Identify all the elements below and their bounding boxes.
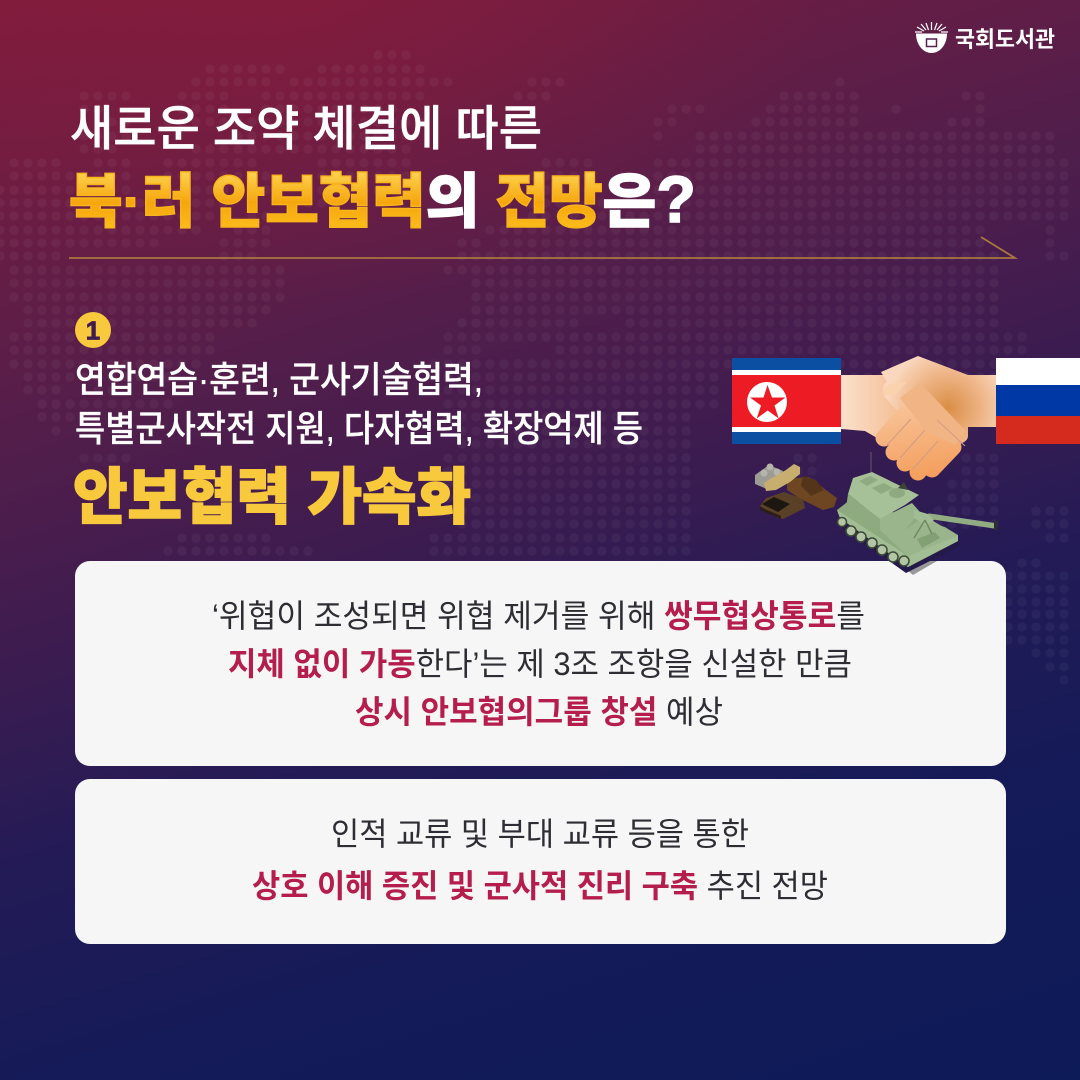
icon: North Korea flag xyxy=(732,358,841,444)
background world map dots xyxy=(0,55,1078,680)
number badge 1: 1 xyxy=(86,316,100,346)
brown truck xyxy=(787,477,837,510)
number badge 1 xyxy=(75,312,111,348)
icon: library emblem xyxy=(915,22,948,53)
ground shadow xyxy=(896,561,937,575)
panel: card 1 xyxy=(75,561,1006,766)
gun barrel xyxy=(928,516,996,526)
gun mount xyxy=(914,510,934,526)
title line 1: 새로운 조약 체결에 따른 xyxy=(70,103,542,156)
hull xyxy=(837,500,958,567)
front glacis xyxy=(880,516,958,556)
logo: 국회도서관 xyxy=(915,22,1055,53)
text: card 2 body: 인적 교류 및 부대 교류 등을 통한 xyxy=(331,816,749,852)
hatches xyxy=(859,476,893,494)
sandbags xyxy=(764,464,800,491)
text: card 1 body: 상시 안보협의그룹 창설 예상 xyxy=(355,694,723,730)
subheading text: 연합연습·훈련, 군사기술협력, xyxy=(75,359,483,400)
dark truck xyxy=(760,492,805,519)
text: card 1 body: 지체 없이 가동한다’는 제 3조 조항을 신설한 만큼 xyxy=(228,646,852,682)
subheading text: 특별군사작전 지원, 다자협력, 확장억제 등 xyxy=(75,408,643,449)
fingers xyxy=(884,412,953,472)
right hand upper xyxy=(881,356,996,470)
logo: 국회도서관: 국회도서관 xyxy=(955,27,1055,52)
subheading text xyxy=(75,359,643,449)
icon: self-propelled howitzer tank xyxy=(837,452,998,575)
vent xyxy=(917,532,940,548)
heading: 안보협력 가속화: 안보협력 가속화 xyxy=(73,463,471,531)
turret front face xyxy=(880,503,920,530)
icon: military trucks xyxy=(755,464,837,519)
icon: handshake xyxy=(841,356,996,472)
text: card 2 body xyxy=(252,816,828,904)
turret top xyxy=(848,472,919,519)
title divider with arrow tip xyxy=(69,237,1015,258)
text: card 2 body: 상호 이해 증진 및 군사적 진리 구축 추진 전망 xyxy=(252,868,828,904)
text: card 1 body xyxy=(212,598,865,730)
palm xyxy=(900,383,966,445)
left arm xyxy=(841,375,905,438)
text: card 1 body: ‘위협이 조성되면 위협 제거를 위해 쌍무협상통로를 xyxy=(212,598,865,634)
barrels xyxy=(755,465,783,490)
wheels xyxy=(838,518,909,566)
panel: card 2 xyxy=(75,779,1006,944)
icon: Russia flag xyxy=(996,358,1080,444)
turret left face xyxy=(846,494,880,530)
title line 2: 북·러 안보협력의 전망은? xyxy=(69,162,696,236)
antenna xyxy=(870,452,872,472)
